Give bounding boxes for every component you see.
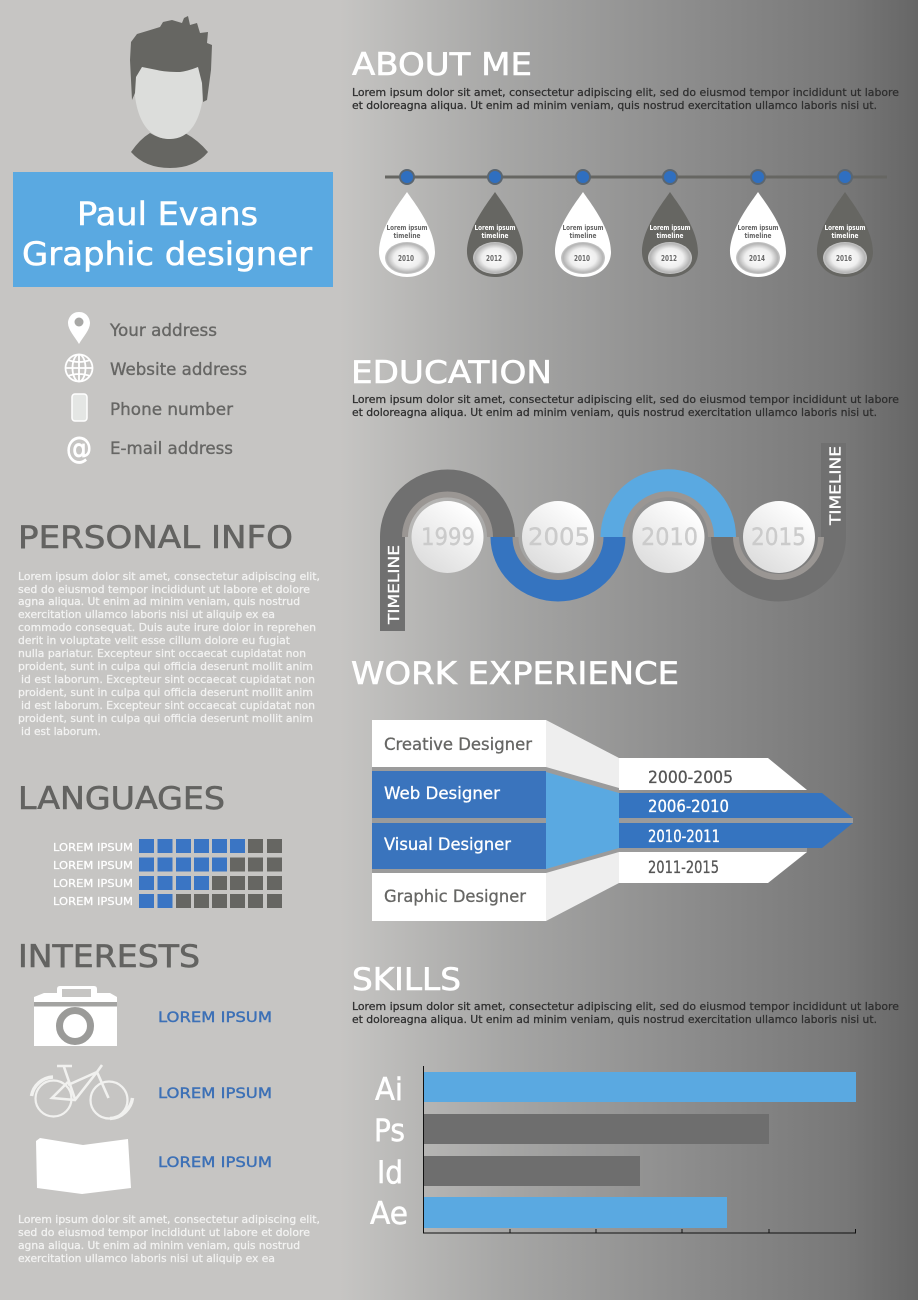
text block: personal info <box>18 571 320 738</box>
language squares row 2 <box>139 858 282 872</box>
chart: education snake timeline <box>385 443 844 631</box>
text block: personal info: agna aliqua. Ut enim ad minim veniam, quis nostrud <box>18 596 300 608</box>
year 2010: 2010 <box>641 523 698 551</box>
text block: education <box>352 394 899 419</box>
name card <box>13 172 333 287</box>
period: 2000-2005 <box>619 758 807 790</box>
text block: about me: et doloreagna aliqua. Ut enim ad minim veniam, quis nostrud exercitation ullamco laboris nisi ut. <box>352 100 877 112</box>
text block: personal info: proident, sunt in culpa qui officia deserunt mollit anim <box>18 661 313 673</box>
language labels: LOREM IPSUM <box>53 860 133 872</box>
icon: at sign: @ <box>66 431 92 466</box>
language squares row 3 <box>139 876 282 890</box>
year 2005: 2005 <box>528 523 590 551</box>
role: web designer <box>372 771 546 818</box>
timeline label left: TIMELINE <box>385 545 403 625</box>
interest label: bicycle: LOREM IPSUM <box>158 1086 272 1102</box>
timeline node 2014: Lorem ipsum <box>738 224 778 232</box>
period: 2010-2011 <box>619 823 853 848</box>
timeline node 2012 second <box>642 170 698 277</box>
role: creative designer: Creative Designer <box>384 735 532 755</box>
year 2015: 2015 <box>751 523 806 551</box>
timeline node 2010 second: Lorem ipsum <box>562 224 604 232</box>
text block: education: Lorem ipsum dolor sit amet, consectetur adipiscing elit, sed do eiusmod tempor incididunt ut labore <box>352 394 899 406</box>
timeline node 2012 second: 2012 <box>661 254 677 263</box>
bar: Id: Id <box>377 1155 403 1191</box>
language labels: LOREM IPSUM <box>53 896 133 908</box>
timeline node 2016: Lorem ipsum <box>824 224 866 232</box>
year 2005 <box>522 501 594 573</box>
period: 2011-2015 <box>619 852 807 883</box>
bar: Ai: Ai <box>375 1072 403 1108</box>
timeline node 2012 second: Lorem ipsum <box>650 224 690 232</box>
icon: phone <box>72 394 87 421</box>
chart axes <box>424 1066 856 1233</box>
text block: skills: et doloreagna aliqua. Ut enim ad minim veniam, quis nostrud exercitation ullamco laboris nisi ut. <box>352 1014 877 1026</box>
role: web designer: Web Designer <box>384 784 500 804</box>
timeline node 2014 <box>730 170 786 277</box>
timeline node 2014: timeline <box>744 232 772 240</box>
heading: interests: INTERESTS <box>18 939 200 975</box>
inner halos <box>405 494 821 577</box>
text block: skills <box>352 1001 899 1026</box>
text block: personal info: commodo consequat. Duis aute irure dolor in reprehen <box>18 622 316 634</box>
text block: interests: agna aliqua. Ut enim ad minim veniam, quis nostrud <box>18 1240 300 1252</box>
icon: bicycle <box>32 1065 132 1118</box>
chart: language levels <box>53 839 282 908</box>
period: 2010-2011: 2010-2011 <box>648 827 720 847</box>
timeline node 2014: 2014 <box>749 254 765 263</box>
bar: Ae: Ae <box>370 1196 408 1232</box>
language labels <box>53 842 133 908</box>
text block: personal info: derit in voluptate velit esse cillum dolore eu fugiat <box>18 635 290 647</box>
bar: Ae <box>370 1196 727 1232</box>
text block: personal info: sed do eiusmod tempor incididunt ut labore et dolore <box>18 584 310 596</box>
text block: skills: Lorem ipsum dolor sit amet, consectetur adipiscing elit, sed do eiusmod tempor incididunt ut labore <box>352 1001 899 1013</box>
timeline axis <box>385 176 887 178</box>
year 1999: 1999 <box>421 523 475 551</box>
email text: E-mail address <box>110 439 233 459</box>
timeline node 2010 <box>379 170 435 277</box>
language squares row 4 <box>139 894 282 908</box>
year 1999 <box>412 501 484 573</box>
language squares row 1 <box>139 839 282 853</box>
text block: personal info: proident, sunt in culpa qui officia deserunt mollit anim <box>18 687 313 699</box>
role: creative designer <box>372 720 546 767</box>
timeline node 2010: Lorem ipsum <box>386 224 428 232</box>
text block: interests <box>18 1214 320 1265</box>
panel: interests <box>18 986 320 1265</box>
website text: Website address <box>110 360 247 380</box>
text block: interests: exercitation ullamco laboris nisi ut aliquip ex ea <box>18 1253 275 1265</box>
period: 2006-2010 <box>619 793 853 818</box>
name card: Paul Evans <box>77 195 258 233</box>
heading: education: EDUCATION <box>351 355 552 391</box>
timeline node 2012 second: timeline <box>656 232 684 240</box>
text block: personal info: id est laborum. Excepteur sint occaecat cupidatat non <box>21 674 315 686</box>
heading: skills: SKILLS <box>352 962 461 998</box>
panel: profile header <box>13 16 333 287</box>
role: graphic designer: Graphic Designer <box>384 887 526 907</box>
panel: contact details <box>66 312 247 466</box>
year 2010 <box>632 501 704 573</box>
text block: interests: Lorem ipsum dolor sit amet, consectetur adipiscing elit, <box>18 1214 320 1226</box>
period: 2000-2005: 2000-2005 <box>648 768 733 788</box>
name card: Graphic designer <box>22 235 313 273</box>
timeline node 2010 second: timeline <box>570 232 597 240</box>
icon: avatar portrait <box>130 16 212 168</box>
phone text: Phone number <box>110 400 233 420</box>
timeline node 2016: 2016 <box>836 254 852 263</box>
bar chart: skills <box>370 1066 856 1233</box>
funnel connector middle <box>546 772 619 869</box>
timeline node 2010 second: 2010 <box>574 254 590 263</box>
bar: Id <box>377 1155 640 1191</box>
timeline node 2012: Lorem ipsum <box>474 224 516 232</box>
funnel connector top <box>546 720 619 788</box>
text block: personal info: id est laborum. <box>21 726 101 738</box>
icon: location pin <box>68 312 90 344</box>
timeline node 2010: 2010 <box>398 254 414 263</box>
role: visual designer: Visual Designer <box>384 835 511 855</box>
year 2015 <box>743 501 815 573</box>
timeline node 2010: timeline <box>394 232 421 240</box>
funnel connector bottom <box>546 852 619 921</box>
text block: about me: Lorem ipsum dolor sit amet, consectetur adipiscing elit, sed do eiusmod tempor incididunt ut labore <box>352 87 899 99</box>
heading: work experience: WORK EXPERIENCE <box>351 656 679 692</box>
icon: globe <box>66 354 92 382</box>
heading: personal info: PERSONAL INFO <box>18 520 293 556</box>
icon: camera <box>34 986 117 1046</box>
timeline node 2016 <box>817 170 873 277</box>
text block: personal info: Lorem ipsum dolor sit amet, consectetur adipiscing elit, <box>18 571 320 583</box>
timeline label right: TIMELINE <box>826 446 844 526</box>
interest label: book: LOREM IPSUM <box>158 1155 272 1171</box>
timeline node 2012 <box>467 170 523 277</box>
period: 2006-2010: 2006-2010 <box>648 797 729 817</box>
timeline node 2016: timeline <box>832 232 859 240</box>
language labels: LOREM IPSUM <box>53 842 133 854</box>
text block: personal info: exercitation ullamco laboris nisi ut aliquip ex ea <box>18 609 275 621</box>
text block: about me <box>352 87 899 112</box>
interest label: camera: LOREM IPSUM <box>158 1010 272 1026</box>
role: graphic designer <box>372 873 546 921</box>
timeline node 2012: 2012 <box>486 254 502 263</box>
heading: about me: ABOUT ME <box>352 47 532 83</box>
icon: open book <box>36 1138 131 1194</box>
heading: languages: LANGUAGES <box>18 781 225 817</box>
text block: interests: sed do eiusmod tempor incididunt ut labore et dolore <box>18 1227 310 1239</box>
language labels: LOREM IPSUM <box>53 878 133 890</box>
address text: Your address <box>109 321 217 341</box>
bar: Ai <box>375 1072 856 1108</box>
funnel shadows <box>372 767 853 874</box>
text block: education: et doloreagna aliqua. Ut enim ad minim veniam, quis nostrud exercitation ullamco laboris nisi ut. <box>352 407 877 419</box>
bar: Ps: Ps <box>374 1113 405 1149</box>
snake band <box>392 443 834 631</box>
bar: Ps <box>374 1113 769 1149</box>
period: 2011-2015: 2011-2015 <box>648 858 719 878</box>
role: visual designer <box>372 823 546 869</box>
text block: personal info: proident, sunt in culpa qui officia deserunt mollit anim <box>18 713 313 725</box>
timeline node 2012: timeline <box>482 232 509 240</box>
text block: personal info: nulla pariatur. Excepteur sint occaecat cupidatat non <box>18 648 306 660</box>
text block: personal info: id est laborum. Excepteur sint occaecat cupidatat non <box>21 700 315 712</box>
timeline node 2010 second <box>555 170 611 277</box>
chart: drop timeline <box>379 170 887 277</box>
chart: work experience funnel <box>372 720 853 921</box>
